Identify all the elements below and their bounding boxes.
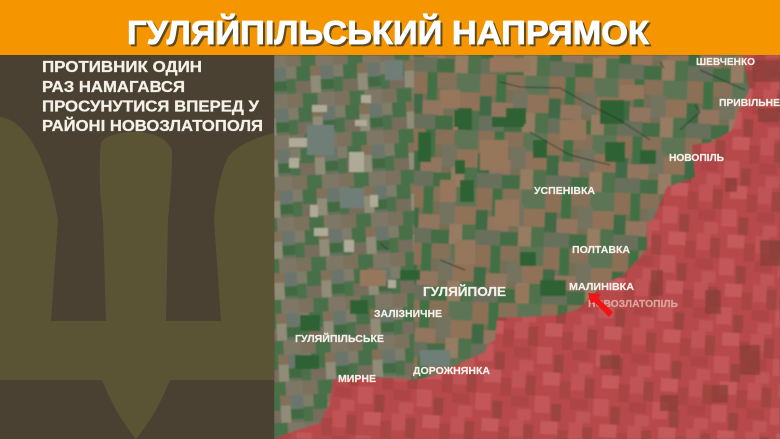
- tan fields: [360, 58, 644, 301]
- settlement labels: МАЛИНІВКА: [569, 281, 634, 293]
- title: ГУЛЯЙПІЛЬСЬКИЙ НАПРЯМОК: [127, 13, 650, 51]
- text block: situation summary: [42, 59, 263, 135]
- settlement labels: НОВОПІЛЬ: [669, 152, 724, 164]
- arrow: enemy attack direction: [588, 293, 613, 317]
- text block: situation summary: ПРОСУНУТИСЯ ВПЕРЕД У: [42, 98, 260, 116]
- map darkening tone: [274, 55, 780, 439]
- text block: situation summary: ПРОТИВНИК ОДИН: [42, 59, 202, 76]
- header banner: [0, 0, 780, 55]
- dark green fields: [295, 100, 656, 369]
- settlement labels: НОВОЗЛАТОПІЛЬ: [588, 298, 678, 310]
- text block: situation summary: РАЙОНІ НОВОЗЛАТОПОЛЯ: [42, 116, 263, 135]
- settlement labels: [295, 56, 780, 385]
- occupied territory overlay: [274, 55, 780, 439]
- darker occupied fields: [600, 60, 780, 411]
- pale fields: [289, 95, 396, 288]
- blue-grey fields: [307, 60, 450, 366]
- settlement labels: ГУЛЯЙПОЛЕ: [423, 284, 506, 299]
- settlement labels: ГУЛЯЙПІЛЬСЬКЕ: [295, 332, 384, 345]
- settlement labels: ДОРОЖНЯНКА: [413, 365, 490, 377]
- settlement labels: ПОЛТАВКА: [572, 244, 630, 256]
- satellite map: [274, 55, 780, 439]
- title: ГУЛЯЙПІЛЬСЬКИЙ НАПРЯМОК: [129, 15, 652, 53]
- icon: trident emblem: [0, 117, 274, 439]
- settlement labels: МИРНЕ: [338, 373, 376, 385]
- settlement labels: ШЕВЧЕНКО: [696, 56, 755, 68]
- settlement labels: УСПЕНІВКА: [534, 185, 595, 197]
- western fields: [274, 55, 414, 439]
- ravines: [380, 62, 745, 270]
- settlement labels: ЗАЛІЗНИЧНЕ: [374, 308, 442, 320]
- text block: situation summary: РАЗ НАМАГАВСЯ: [42, 79, 185, 96]
- settlement labels: ПРИВІЛЬНЕ: [719, 97, 780, 109]
